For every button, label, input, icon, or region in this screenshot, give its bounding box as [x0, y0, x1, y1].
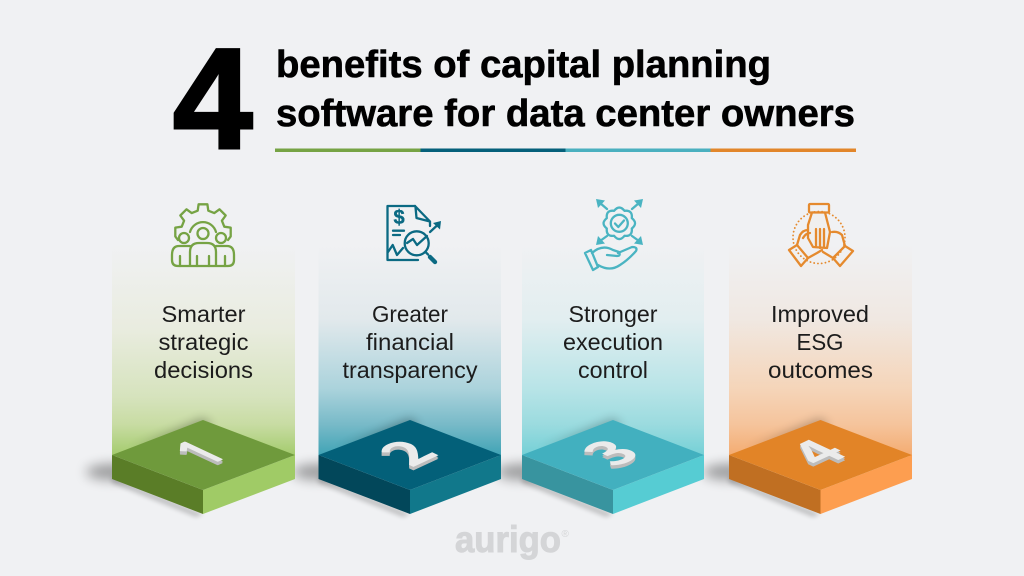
number 1: 1	[162, 436, 243, 474]
number 3: 3	[556, 430, 659, 479]
number 2: 2	[353, 430, 456, 479]
title: benefits of capital planning	[276, 44, 771, 86]
number 4: 4	[763, 427, 866, 475]
big numeral 4: 4	[173, 20, 253, 179]
icon: gear, arrows and hand	[585, 199, 643, 270]
label: greater financial transparency: transparency	[342, 357, 478, 383]
logo: aurigo: ®	[562, 529, 570, 540]
title underline	[275, 148, 856, 152]
label: smarter strategic decisions: Smarter	[162, 301, 246, 327]
label: smarter strategic decisions: decisions	[154, 357, 253, 383]
label: stronger execution control: execution	[563, 329, 663, 355]
block 3	[522, 420, 704, 514]
number 4: 4	[763, 430, 866, 479]
block 2	[318, 420, 501, 514]
panel: smarter strategic decisions	[112, 204, 295, 514]
number 1: 1	[162, 438, 243, 475]
label: smarter strategic decisions	[154, 301, 253, 383]
number 3: 3	[556, 429, 659, 477]
label: improved ESG outcomes: ESG	[796, 329, 844, 355]
logo: aurigo: aurigo	[455, 519, 561, 560]
title: software for data center owners	[276, 93, 855, 135]
label: stronger execution control: control	[578, 357, 648, 383]
icon: joined hands	[789, 204, 853, 266]
number 3: 3	[556, 427, 659, 475]
label: improved ESG outcomes: Improved	[771, 301, 869, 327]
label: improved ESG outcomes: outcomes	[768, 357, 873, 383]
label: greater financial transparency: financial	[366, 329, 454, 355]
number 2: 2	[353, 429, 456, 477]
label: improved ESG outcomes	[768, 301, 873, 383]
block 1	[112, 420, 295, 514]
label: stronger execution control: Stronger	[568, 301, 658, 327]
block shadows	[86, 464, 820, 517]
icon: financial report: $	[393, 207, 405, 229]
number 4: 4	[763, 429, 866, 477]
number 2: 2	[353, 427, 456, 475]
panel: improved ESG outcomes	[729, 204, 912, 514]
label: stronger execution control	[563, 301, 663, 383]
label: greater financial transparency	[342, 301, 478, 383]
block 4	[729, 420, 912, 514]
icon: gear and team	[172, 204, 234, 266]
label: smarter strategic decisions: strategic	[158, 329, 248, 355]
panel: greater financial transparency	[318, 206, 501, 514]
icon: financial report	[388, 206, 441, 262]
number 1: 1	[162, 434, 243, 472]
label: greater financial transparency: Greater	[372, 301, 448, 327]
panel: stronger execution control	[522, 199, 704, 514]
title	[276, 44, 855, 135]
